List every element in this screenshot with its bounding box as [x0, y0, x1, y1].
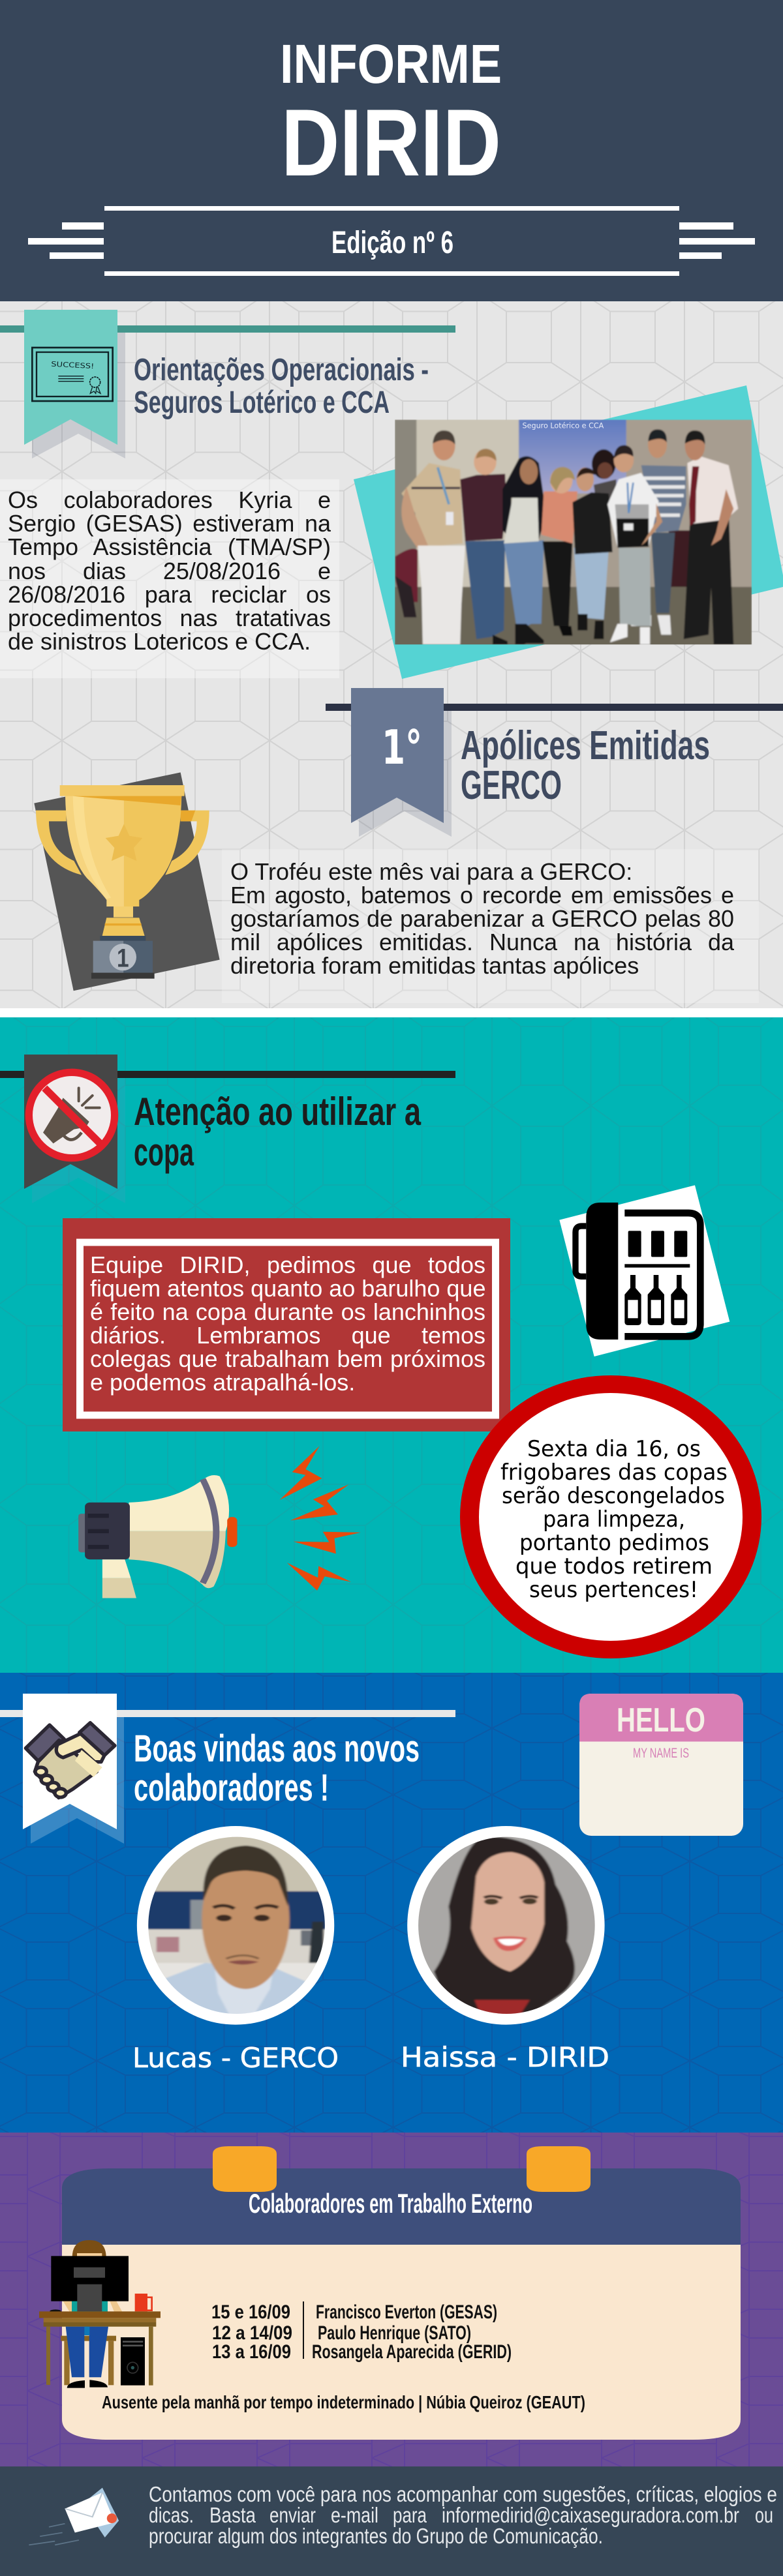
footer text: procurar algum dos integrantes do Grupo de Comunicação.	[149, 2524, 603, 2548]
panel: gray section background	[0, 301, 783, 1008]
heading: Apólices Emitidas: GERCO	[461, 763, 562, 808]
edition banner	[28, 206, 755, 276]
ribbon: no noise	[0, 1055, 455, 1203]
text block: Kyria e Sergio: Os colaboradores Kyria e	[8, 487, 331, 513]
text block: Kyria e Sergio: de sinistros Lotericos e CCA.	[8, 628, 311, 655]
icon: no megaphone	[29, 1072, 115, 1158]
icon: person at desk	[39, 2240, 161, 2388]
label: Haissa: Haissa - DIRID	[401, 2041, 609, 2073]
heading: Atenção: copa	[134, 1130, 194, 1174]
text block: aviso barulho: diários. Lembramos que temos	[90, 1322, 485, 1349]
footer text: ou	[755, 2503, 773, 2527]
text block: aviso barulho: fiquem atentos quanto ao barulho que	[90, 1275, 485, 1302]
icon: certificate	[32, 348, 113, 401]
portrait: Haissa	[407, 1826, 605, 2025]
heading: Orientações Operacionais: Seguros Lotérico e CCA	[134, 385, 390, 420]
name tag: hello: MY NAME IS	[633, 1746, 689, 1761]
schedule list: 13 a 16/09	[212, 2341, 291, 2363]
panel: teal section background	[0, 1017, 783, 1673]
text block: aviso barulho: colegas que trabalham bem próximos	[90, 1345, 485, 1372]
text block: troféu GERCO: O Troféu este mês vai para a GERCO:	[230, 858, 632, 885]
text block: troféu GERCO	[230, 858, 735, 979]
footer text: para	[393, 2503, 427, 2527]
label: Lucas: Lucas - GERCO	[132, 2042, 339, 2074]
callout text: serão descongelados	[502, 1483, 725, 1509]
header background	[0, 0, 783, 301]
callout text: para limpeza,	[543, 1506, 685, 1533]
text block: aviso barulho	[90, 1251, 485, 1396]
panel: blue section background	[0, 1673, 783, 2133]
icon: flying envelope	[29, 2488, 119, 2545]
text block: troféu GERCO: Em agosto, batemos o recorde em emissões e	[230, 882, 734, 908]
callout: fridge notice	[460, 1375, 761, 1658]
portrait: Lucas	[137, 1826, 334, 2025]
red notice box	[63, 1218, 510, 1431]
calendar rings	[213, 2146, 591, 2192]
text block: Kyria e Sergio: Sergio (GESAS) estiveram na	[8, 510, 331, 537]
name tag: hello: HELLO	[617, 1701, 705, 1739]
white strip	[0, 1008, 783, 1017]
heading: Orientações Operacionais: Orientações Operacionais -	[134, 353, 429, 387]
schedule list: 15 e 16/09	[211, 2301, 290, 2323]
text block: Kyria e Sergio: procedimentos nas tratativas	[8, 605, 331, 631]
text block: Kyria e Sergio: nos dias 25/08/2016 e	[8, 558, 331, 584]
ribbon: first place	[326, 688, 783, 837]
callout text: portanto pedimos	[519, 1530, 709, 1556]
icon: handshake	[25, 1723, 115, 1798]
panel: purple section background	[0, 2133, 783, 2466]
icon: certificate: SUCCESS!	[51, 360, 95, 370]
calendar: external work	[62, 2146, 741, 2440]
edition label: Edição nº 6	[331, 226, 453, 260]
icon: minibar	[559, 1185, 729, 1356]
ribbon: certificate	[0, 310, 455, 458]
photo: team	[395, 419, 752, 646]
callout text: frigobares das copas	[500, 1460, 728, 1486]
schedule list: 12 a 14/09	[212, 2322, 292, 2344]
title: INFORME: INFORME	[280, 33, 502, 95]
schedule list: Paulo Henrique (SATO)	[318, 2322, 471, 2344]
text block: aviso barulho: é feito na copa durante os lanchinhos	[90, 1298, 485, 1325]
footer text	[149, 2482, 777, 2548]
title: DIRID: DIRID	[281, 89, 501, 196]
ribbon: handshake	[0, 1694, 455, 1844]
heading: Atenção: Atenção ao utilizar a	[134, 1090, 421, 1133]
schedule list: Rosangela Aparecida (GERID)	[312, 2341, 512, 2363]
text block: troféu GERCO: gostaríamos de parabenizar a GERCO pelas 80	[230, 905, 734, 932]
text block: troféu GERCO: mil apólices emitidas. Nunca na história da	[230, 929, 734, 955]
text panel backdrop	[222, 849, 759, 1003]
schedule list: Francisco Everton (GESAS)	[316, 2301, 497, 2323]
photo slide title: Seguro Lotérico e CCA	[523, 421, 604, 430]
footer text: dicas.	[149, 2503, 194, 2527]
icon: trophy: 1	[117, 944, 129, 973]
callout text	[500, 1436, 728, 1603]
panel: footer background	[0, 2466, 783, 2576]
icon: trophy	[34, 772, 220, 991]
absence note: Ausente pela manhã por tempo indeterminado | Núbia Queiroz (GEAUT)	[102, 2392, 585, 2412]
heading: Boas vindas: colaboradores !	[134, 1767, 329, 1809]
text block: Kyria e Sergio: 26/08/2016 para reciclar os	[8, 581, 331, 608]
callout text: Sexta dia 16, os	[527, 1436, 701, 1462]
callout text: que todos retirem	[515, 1553, 713, 1580]
text panel backdrop	[0, 479, 339, 678]
heading: Boas vindas	[134, 1728, 420, 1809]
text block: aviso barulho: e podemos atrapalhá-los.	[90, 1369, 355, 1396]
footer text: enviar	[269, 2503, 316, 2527]
footer text: Basta	[209, 2503, 256, 2527]
heading: Orientações Operacionais	[134, 353, 429, 420]
text block: aviso barulho: Equipe DIRID, pedimos que todos	[90, 1251, 485, 1278]
teal rotated frame	[354, 385, 783, 679]
text block: Kyria e Sergio: Tempo Assistência (TMA/SP)	[8, 533, 331, 560]
heading: Atenção	[134, 1090, 421, 1174]
heading: Boas vindas: Boas vindas aos novos	[134, 1728, 420, 1770]
name tag: hello	[579, 1694, 743, 1836]
ranking label: 1°	[382, 720, 422, 775]
text block: troféu GERCO: diretoria foram emitidas tantas apólices	[230, 952, 639, 979]
footer text: e-mail	[331, 2503, 378, 2527]
schedule list	[211, 2301, 512, 2363]
icon: megaphone and sparks	[78, 1446, 363, 1598]
heading: Apólices Emitidas	[461, 723, 710, 808]
callout text: seus pertences!	[529, 1577, 698, 1603]
calendar title: Colaboradores em Trabalho Externo	[249, 2188, 532, 2219]
text block: Kyria e Sergio	[8, 487, 331, 655]
